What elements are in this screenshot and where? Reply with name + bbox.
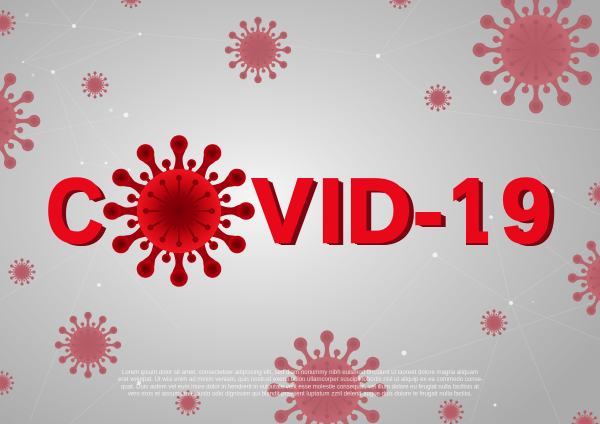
virus: small right of top [424, 84, 452, 112]
virus: top edge left [120, 0, 142, 8]
virus: upper left small [81, 71, 109, 99]
virus: large bottom centre [267, 330, 387, 424]
virus: left small [8, 258, 36, 286]
title: COVID-19 letters: 1 [449, 161, 492, 262]
main red virus icon [103, 135, 255, 287]
title: COVID-19 letters: - [413, 161, 443, 262]
title: COVID-19 letters: 9 [501, 161, 552, 262]
virus: large top right [473, 0, 599, 113]
long spikes [103, 135, 255, 287]
short spikes [126, 158, 232, 264]
virus: bottom small right [438, 399, 464, 424]
virus: lower left [55, 312, 121, 378]
lorem ipsum paragraph [118, 369, 483, 398]
title: COVID-19 letters: V [252, 161, 313, 262]
virus: left edge [0, 67, 40, 175]
virus: bottom right corner [571, 410, 599, 424]
title: COVID-19 letters [46, 161, 554, 262]
virus: right lower small [480, 309, 508, 337]
virus: bottom left corner [0, 371, 14, 395]
virus: bottom small left [175, 390, 201, 416]
virus body [137, 169, 221, 253]
virus: top edge right [388, 0, 412, 9]
lorem ipsum paragraph: vero eros et accumsan et iusto odio dignissim qui blandit praesent luptatum zzril delenit augue duis dolore te feugait nulla facilisi. [128, 390, 472, 398]
virus: right edge middle [568, 236, 600, 320]
title: COVID-19 letters: C [46, 161, 103, 262]
virus: right edge upper [588, 181, 600, 207]
lorem ipsum paragraph: erat volutpat. Ut wisi enim ad minim veniam, quis nostrud exerci tation ullamcorper suscipit lobortis nisl ut aliquip ex ea commodo conse- [118, 376, 483, 383]
lorem ipsum paragraph: Lorem ipsum dolor sit amet, consectetuer adipiscing elit, sed diam nonummy nibh euismod tincidunt ut laoreet dolore magna aliquam [122, 369, 478, 376]
virus: top centre [225, 17, 291, 83]
title: COVID-19 letters: D [346, 161, 412, 262]
title: COVID-19 letters: I [318, 161, 343, 262]
body dots and spokes [143, 175, 215, 247]
virus: top left corner [0, 10, 16, 36]
lorem ipsum paragraph: quat. Duis autem vel eum iriure dolor in hendrerit in vulputate velit esse molestie consequat, vel illum dolore eu feugiat nulla facilisis at [121, 384, 479, 390]
